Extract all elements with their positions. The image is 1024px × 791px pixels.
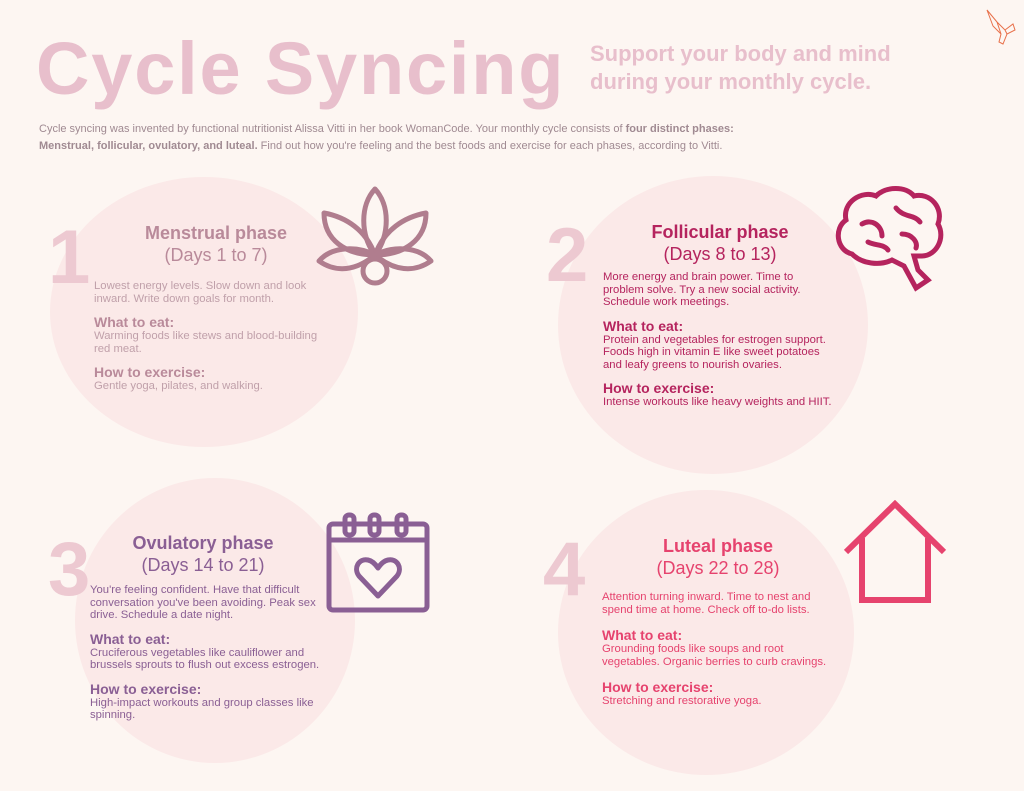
text block: How to exercise: [94, 364, 205, 380]
number 3: 3 [48, 527, 90, 612]
text block: How to exercise: [602, 679, 713, 695]
number 4: 4 [543, 527, 585, 612]
text block: How to exercise: [90, 680, 201, 696]
subtitle: during your monthly cycle. [590, 69, 871, 94]
text block [90, 533, 319, 721]
text block: What to eat: [94, 314, 174, 330]
intro text: Menstrual, follicular, ovulatory, and luteal. Find out how you're feeling and the best foods and exercise for each phases, according to Vitti. [39, 140, 722, 152]
text block: Stretching and restorative yoga. [602, 695, 762, 707]
icon: lotus [316, 186, 434, 286]
intro text: Cycle syncing was invented by functional nutritionist Alissa Vitti in her book WomanCode. Your monthly cycle consists of four distinct phases: [39, 123, 734, 135]
text block: Gentle yoga, pilates, and walking. [94, 380, 263, 392]
text block: Ovulatory phase [132, 533, 274, 553]
text block: Lowest energy levels. Slow down and look inward. Write down goals for month. [94, 280, 306, 304]
panel: menstrual [48, 177, 434, 447]
text block: What to eat: [603, 318, 683, 334]
icon: house [844, 500, 946, 603]
text block: (Days 1 to 7) [164, 245, 268, 265]
subtitle: Support your body and mind [590, 41, 891, 66]
number 2: 2 [546, 213, 588, 298]
text block: More energy and brain power. Time to problem solve. Try a new social activity. Schedule work meetings. [603, 271, 801, 308]
panel: ovulatory [48, 478, 430, 763]
number 1: 1 [48, 215, 90, 300]
icon: bird logo [986, 10, 1016, 45]
text block: How to exercise: [603, 380, 714, 396]
text block: Intense workouts like heavy weights and HIIT. [603, 396, 832, 408]
text block: (Days 14 to 21) [141, 555, 265, 575]
text block: High-impact workouts and group classes like spinning. [90, 696, 314, 721]
text block: You're feeling confident. Have that difficult conversation you've been avoiding. Peak sex drive. Schedule a date night. [90, 584, 316, 621]
title: Cycle Syncing [36, 27, 565, 110]
subtitle [590, 41, 891, 94]
text block: Grounding foods like soups and root vegetables. Organic berries to curb cravings. [602, 643, 826, 668]
text block: (Days 8 to 13) [663, 244, 777, 264]
text block: Protein and vegetables for estrogen support. Foods high in vitamin E like sweet potatoes and leafy greens to nourish ovaries. [603, 334, 826, 370]
text block: Menstrual phase [145, 223, 287, 243]
text block: (Days 22 to 28) [656, 558, 780, 578]
text block [602, 536, 826, 707]
icon: calendar heart [326, 512, 430, 612]
text block: Luteal phase [663, 536, 773, 556]
intro text [39, 123, 734, 152]
panel: follicular [546, 176, 944, 474]
text block: Cruciferous vegetables like cauliflower and brussels sprouts to flush out excess estrogen. [90, 646, 319, 671]
icon: brain [836, 186, 944, 292]
text block [94, 223, 317, 392]
text block: Warming foods like stews and blood-building red meat. [94, 330, 317, 354]
text block: Follicular phase [651, 222, 789, 242]
text block: What to eat: [90, 630, 170, 646]
text block: Attention turning inward. Time to nest and spend time at home. Check off to-do lists. [602, 591, 810, 616]
text block [603, 222, 832, 408]
panel: luteal [543, 490, 946, 775]
text block: What to eat: [602, 627, 682, 643]
